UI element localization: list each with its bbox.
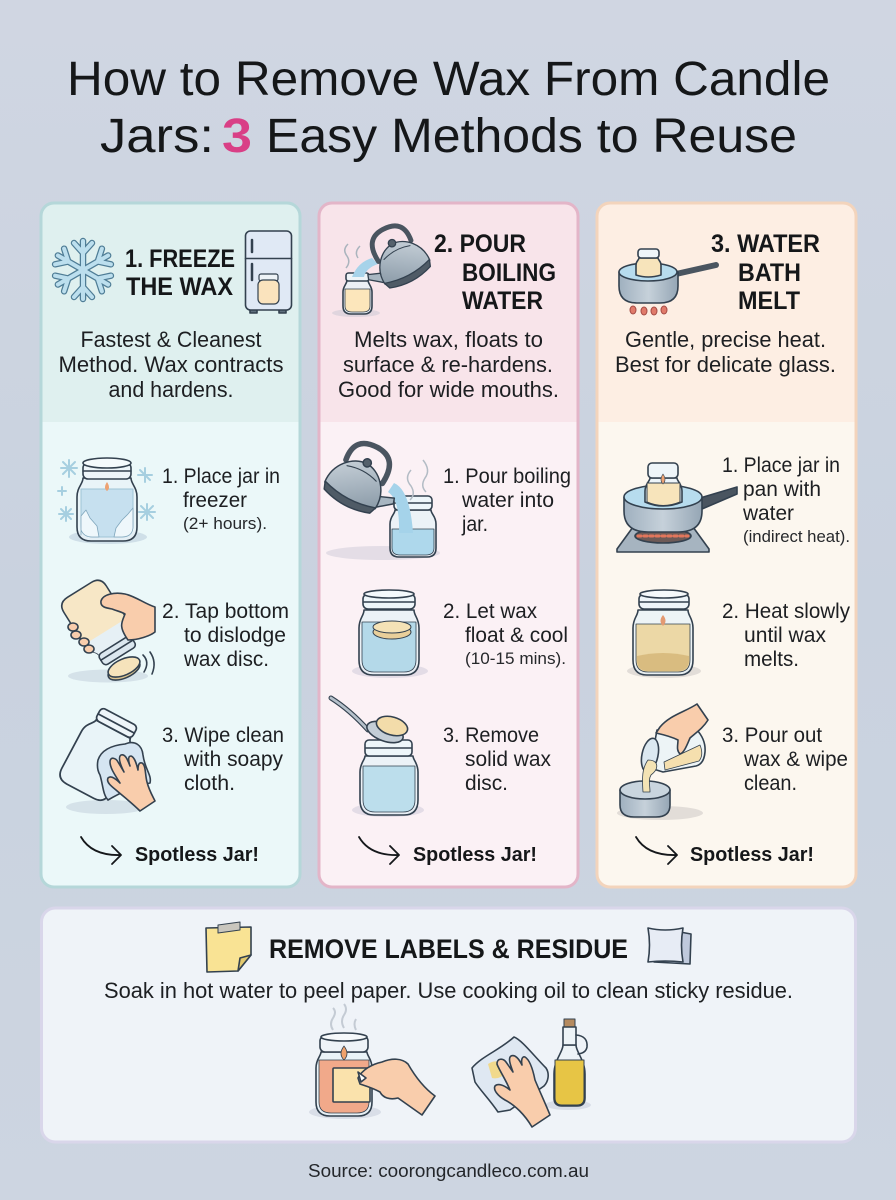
heading: pour boiling water: BOILING xyxy=(462,259,556,287)
step 3 text xyxy=(162,723,284,795)
result label: Spotless Jar! xyxy=(690,844,814,866)
arrow xyxy=(359,837,399,864)
step 1 text: water into xyxy=(461,488,554,512)
description xyxy=(615,327,836,377)
step 3 text: 3. Remove xyxy=(443,723,539,747)
step 3 illustration: wiping jar xyxy=(56,704,155,814)
step 3 text xyxy=(722,723,848,795)
description: Gentle, precise heat. xyxy=(625,327,826,352)
step 1 text xyxy=(722,453,850,546)
step 2 illustration: jar with melting wax xyxy=(627,590,701,678)
icon: pan with jar on burner xyxy=(619,249,716,315)
description: and hardens. xyxy=(108,377,234,402)
heading: water bath melt xyxy=(711,230,820,315)
heading: water bath melt: MELT xyxy=(738,287,800,315)
step 2 text: 2. Tap bottom xyxy=(162,599,289,623)
heading: freeze the wax: THE WAX xyxy=(126,273,233,301)
step 3 text: 3. Pour out xyxy=(722,723,822,747)
title: 3 xyxy=(222,109,252,163)
step 1 text: (2+ hours). xyxy=(183,515,267,533)
step 2 text: (10-15 mins). xyxy=(465,650,566,668)
step 3 text: wax & wipe xyxy=(743,747,848,771)
step 3 text: clean. xyxy=(744,771,797,795)
step 2 text xyxy=(162,599,289,671)
step 1 text: 1. Place jar in xyxy=(162,464,280,488)
description: Melts wax, floats to xyxy=(354,327,543,352)
result label: Spotless Jar! xyxy=(413,844,537,866)
title: Jars: xyxy=(100,109,214,163)
step 3 text: 3. Wipe clean xyxy=(162,723,284,747)
description xyxy=(338,327,559,402)
description: surface & re-hardens. xyxy=(343,352,553,377)
icon: snowflake xyxy=(53,241,113,299)
step 2 text xyxy=(443,599,568,668)
step 2 illustration: tapping jar xyxy=(58,577,155,684)
description: Good for wide mouths. xyxy=(338,377,559,402)
step 2 text: until wax xyxy=(744,623,826,647)
step 3 text: cloth. xyxy=(184,771,235,795)
step 1 text: water xyxy=(742,501,794,525)
step 3 text: with soapy xyxy=(183,747,283,771)
panel: method 3 water bath melt xyxy=(597,203,856,887)
step 1 text: jar. xyxy=(461,512,488,536)
step 3 text xyxy=(443,723,551,795)
title: Easy Methods to Reuse xyxy=(266,109,797,163)
title xyxy=(67,52,830,163)
heading: pour boiling water: 2. POUR xyxy=(434,230,526,258)
step 2 text: 2. Heat slowly xyxy=(722,599,850,623)
step 3 illustration: pouring out wax xyxy=(617,704,708,820)
heading: freeze the wax xyxy=(125,245,235,301)
step 1 text: 1. Pour boiling xyxy=(443,464,571,488)
icon: fridge with jar xyxy=(246,231,292,313)
step 1 text: (indirect heat). xyxy=(743,528,850,546)
arrow xyxy=(81,837,121,864)
panel: remove labels and residue xyxy=(42,908,856,1142)
step 2 text: float & cool xyxy=(465,623,568,647)
heading: pour boiling water: WATER xyxy=(462,287,543,315)
icon: kettle pouring into candle jar xyxy=(332,217,435,317)
description: Fastest & Cleanest xyxy=(80,327,262,352)
title: How to Remove Wax From Candle xyxy=(67,52,830,106)
step 3 text: disc. xyxy=(465,771,508,795)
heading: pour boiling water xyxy=(434,230,556,315)
heading: REMOVE LABELS & RESIDUE xyxy=(269,934,628,964)
step 2 text: melts. xyxy=(744,647,799,671)
step 1 text: freezer xyxy=(183,488,247,512)
description: Best for delicate glass. xyxy=(615,352,836,377)
step 1 illustration: kettle pouring water xyxy=(319,433,440,560)
source: Source: coorongcandleco.com.au xyxy=(308,1160,589,1181)
step 2 text: wax disc. xyxy=(183,647,269,671)
description: Method. Wax contracts xyxy=(58,352,284,377)
icon: folded cloth xyxy=(648,928,691,964)
step 1 text xyxy=(162,464,280,533)
panel: method 1 freeze the wax xyxy=(41,203,300,887)
arrow xyxy=(636,837,677,864)
step 2 text: to dislodge xyxy=(184,623,286,647)
step 3 illustration: spoon lifting wax disc xyxy=(331,698,424,817)
description xyxy=(58,327,284,402)
step 1 text: 1. Place jar in xyxy=(722,453,840,477)
illustration: peeling label from jar xyxy=(309,1004,435,1119)
panel: method 2 pour boiling water xyxy=(319,203,578,887)
heading: freeze the wax: 1. FREEZE xyxy=(125,245,235,273)
step 3 text: solid wax xyxy=(465,747,551,771)
step 2 text xyxy=(722,599,850,671)
description: Soak in hot water to peel paper. Use cooking oil to clean sticky residue. xyxy=(104,978,793,1003)
step 1 text xyxy=(443,464,571,536)
result label: Spotless Jar! xyxy=(135,844,259,866)
icon: sticky note xyxy=(206,922,251,972)
step 2 text: 2. Let wax xyxy=(443,599,537,623)
illustration: wiping residue with cloth and oil xyxy=(472,1019,591,1127)
heading: water bath melt: BATH xyxy=(738,259,801,287)
step 1 illustration: jar in freezer xyxy=(58,458,155,544)
step 1 illustration: jar in pan on stove xyxy=(617,463,737,552)
step 2 illustration: wax floating in jar xyxy=(352,590,428,678)
heading: water bath melt: 3. WATER xyxy=(711,230,820,258)
step 1 text: pan with xyxy=(743,477,821,501)
